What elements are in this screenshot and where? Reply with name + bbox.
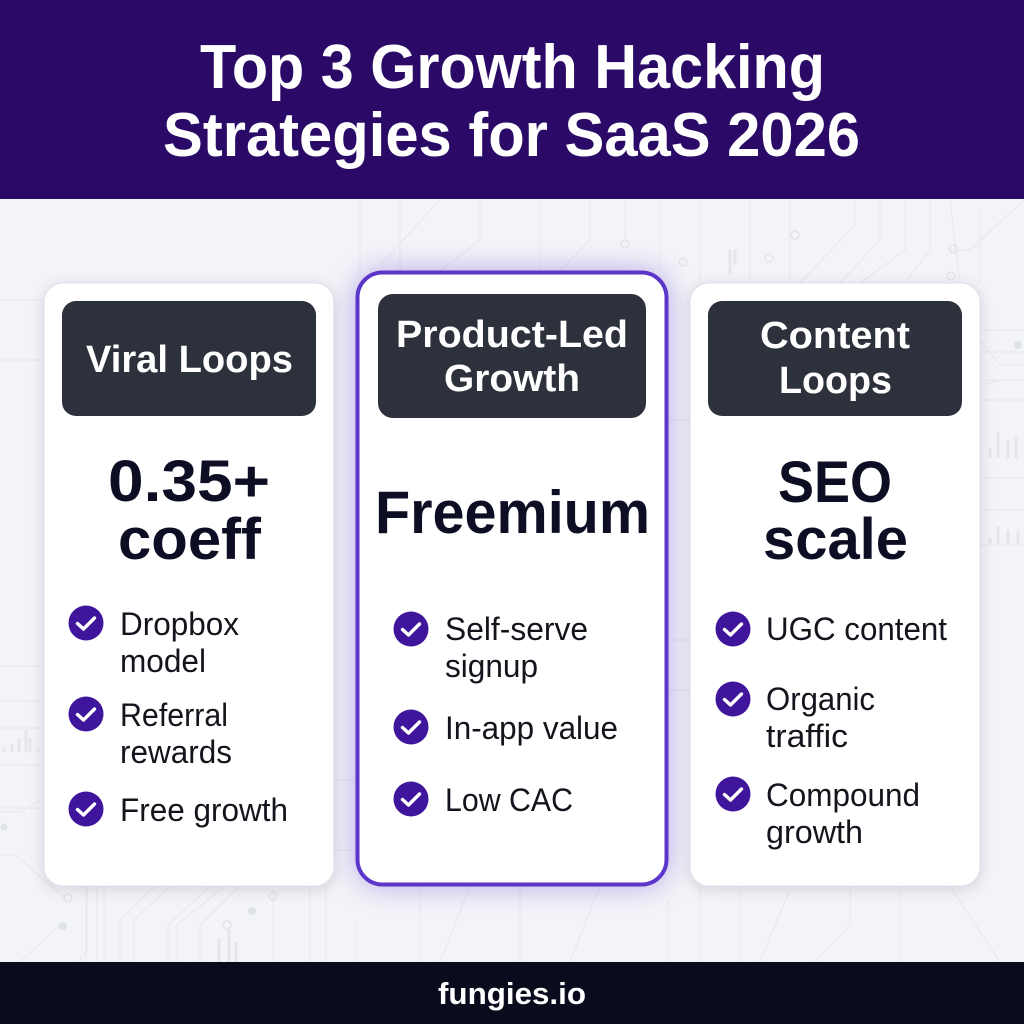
list item: Self-serve signup [394,611,588,684]
list item: Low CAC: Low CAC [445,782,573,818]
metric: SEO scale: scale [763,507,908,572]
header: Content Loops [708,301,962,416]
list item: Referral rewards: Referral [120,697,228,733]
list item: Compound growth [716,776,920,850]
header: Content Loops: Content [760,315,910,357]
list item: Dropbox model: Dropbox [120,606,239,642]
list item: Organic traffic: traffic [766,718,848,754]
header band [0,0,1024,199]
metric: 0.35+ coeff: 0.35+ [108,449,270,514]
list item: Self-serve signup: Self-serve [445,611,588,647]
list item: Free growth: Free growth [120,792,288,828]
title: Top 3 Growth Hacking [200,33,825,102]
list item: Compound growth: Compound [766,777,920,813]
title: Strategies for SaaS 2026 [163,101,860,170]
panel: Content Loops [690,283,980,886]
list item: Low CAC [394,782,573,818]
header: Product-Led Growth [378,294,646,418]
header: Content Loops: Loops [779,360,892,402]
list item: Referral rewards: rewards [120,734,232,770]
list item: Referral rewards [68,696,232,770]
footer brand text: fungies.io [438,976,586,1011]
metric: Freemium: Freemium [375,479,650,546]
list item: Organic traffic: Organic [766,681,875,717]
header: Viral Loops: Viral Loops [86,339,293,381]
metric: 0.35+ coeff: coeff [118,507,262,572]
list item: Self-serve signup: signup [445,648,538,684]
header: Viral Loops [62,301,316,416]
list item: UGC content: UGC content [766,611,947,647]
metric: SEO scale: SEO [778,450,892,515]
footer band [0,962,1024,1024]
list item: Compound growth: growth [766,814,863,850]
metric: SEO scale [763,450,908,572]
list item: In-app value: In-app value [445,710,618,746]
panel: Product-Led Growth (highlighted) [358,272,666,884]
list item: Organic traffic [716,681,875,754]
list item: Dropbox model: model [120,643,206,679]
header: Product-Led Growth: Growth [444,358,580,400]
list item: Dropbox model [68,606,239,679]
title [163,33,860,170]
panel: Viral Loops [44,283,334,886]
header: Product-Led Growth: Product-Led [396,314,628,356]
metric: 0.35+ coeff [108,449,270,572]
